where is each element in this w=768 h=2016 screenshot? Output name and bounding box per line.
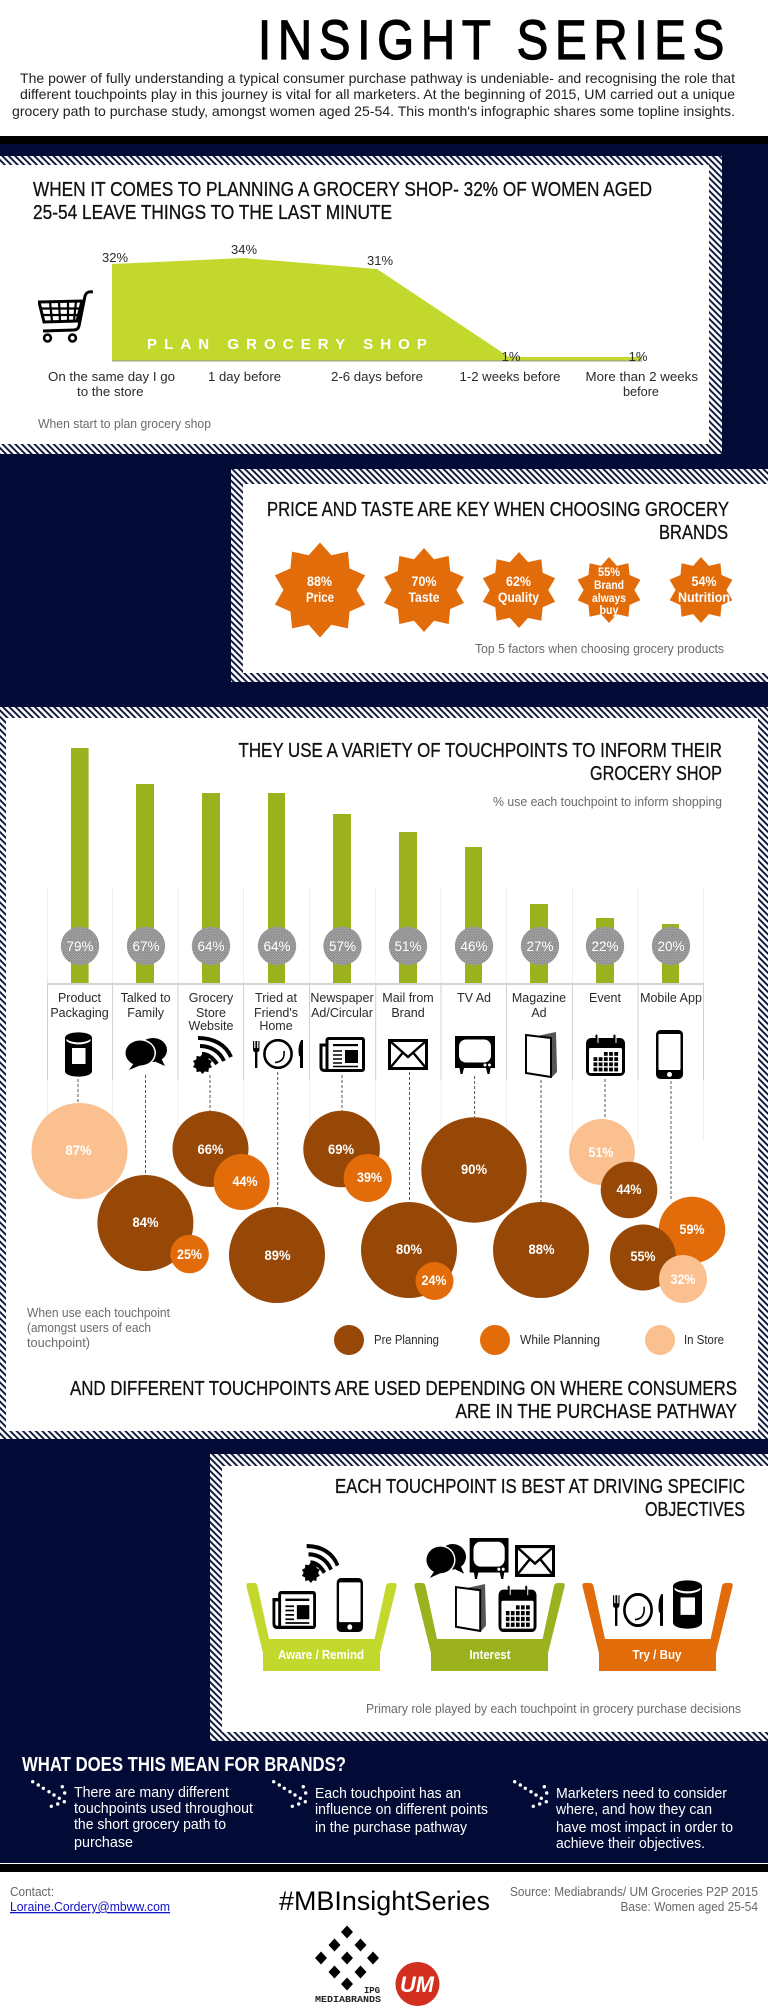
touchpoint labels: Brand bbox=[391, 1006, 425, 1020]
starburst: quality: Quality bbox=[498, 589, 539, 605]
intro text: grocery path to purchase study, amongst women aged 25-54. This month's infographic shares some topline insights. bbox=[12, 103, 735, 119]
logo: ipg mediabrands bbox=[315, 1926, 382, 2005]
touchpoint labels: Mobile App bbox=[640, 991, 702, 1005]
takeaway 3: Marketers need to consider bbox=[556, 1786, 727, 1802]
hashtag: #MBInsightSeries bbox=[279, 1886, 490, 1916]
bubble chart: 80% bbox=[396, 1241, 423, 1257]
icon: tv bbox=[470, 1538, 509, 1579]
caption: when use each touchpoint: touchpoint) bbox=[27, 1335, 90, 1350]
heading: planning bbox=[33, 179, 652, 224]
heading: objectives bbox=[335, 1476, 745, 1521]
heading: touchpoints: GROCERY SHOP bbox=[590, 763, 722, 785]
contact: Loraine.Cordery@mbww.com bbox=[10, 1899, 170, 1914]
category labels bbox=[48, 369, 699, 399]
touchpoint labels: Friend's bbox=[254, 1006, 298, 1020]
heading: planning: WHEN IT COMES TO PLANNING A GROCERY SHOP- 32% OF WOMEN AGED bbox=[33, 179, 652, 201]
icon: plate bbox=[253, 1040, 303, 1068]
heading: planning: 25-54 LEAVE THINGS TO THE LAST MINUTE bbox=[33, 202, 392, 224]
touchpoint labels: Store bbox=[196, 1006, 226, 1020]
bubble chart: 25% bbox=[177, 1246, 202, 1262]
caption: planning: When start to plan grocery shop bbox=[38, 416, 211, 431]
bar chart bbox=[71, 748, 679, 983]
basket: try / buy bbox=[582, 1583, 733, 1671]
legend: Pre Planning bbox=[374, 1332, 439, 1347]
grid lines bbox=[48, 888, 704, 1140]
touchpoint labels: Grocery bbox=[189, 991, 234, 1005]
icon: shopping cart bbox=[38, 290, 93, 343]
starburst: brand always buy bbox=[578, 557, 640, 623]
area chart: PLAN GROCERY SHOP bbox=[147, 336, 434, 353]
basket: interest: Interest bbox=[470, 1647, 511, 1662]
icon: newspaper bbox=[274, 1593, 315, 1627]
section: what does this mean for brands bbox=[22, 1754, 733, 1852]
starburst: quality bbox=[483, 552, 555, 628]
area chart: 1% bbox=[502, 349, 521, 364]
bubble chart: 32% bbox=[670, 1271, 696, 1287]
percentage badges: 27% bbox=[526, 939, 554, 954]
bubble chart: 24% bbox=[422, 1272, 447, 1288]
takeaway 1: There are many different bbox=[74, 1785, 229, 1801]
caption: when use each touchpoint: (amongst users of each bbox=[27, 1320, 151, 1335]
heading: price and taste bbox=[267, 499, 729, 544]
legend: In Store bbox=[684, 1332, 724, 1347]
heading: brands: WHAT DOES THIS MEAN FOR BRANDS? bbox=[22, 1754, 346, 1776]
touchpoint labels: TV Ad bbox=[457, 991, 491, 1005]
panel: objectives bbox=[210, 1454, 768, 1741]
percentage badges: 64% bbox=[263, 939, 291, 954]
takeaway 1 bbox=[31, 1780, 253, 1851]
chart baseline bbox=[47, 983, 704, 985]
starburst: brand always buy: Brand bbox=[594, 578, 624, 592]
icon: wifi burst bbox=[302, 1546, 338, 1583]
logo: ipg mediabrands: IPG bbox=[364, 1986, 380, 1996]
bubble chart: 89% bbox=[264, 1247, 291, 1263]
icon: chat bubbles bbox=[124, 1038, 167, 1070]
icon: newspaper bbox=[321, 1038, 364, 1070]
area chart: 31% bbox=[367, 253, 393, 268]
touchpoint labels: Magazine bbox=[512, 991, 566, 1005]
area chart: 1% bbox=[629, 349, 648, 364]
takeaway 3 bbox=[513, 1780, 733, 1852]
category labels: 1 day before bbox=[208, 369, 281, 384]
touchpoint labels: Talked to bbox=[121, 991, 171, 1005]
bubble chart: 59% bbox=[680, 1221, 705, 1237]
logo: um bbox=[396, 1962, 440, 2006]
area chart: 34% bbox=[231, 242, 257, 257]
heading: touchpoints bbox=[238, 740, 722, 785]
category labels: before bbox=[623, 384, 659, 399]
icon: chat bubbles bbox=[425, 1544, 466, 1578]
icon: plate bbox=[613, 1594, 663, 1626]
icon: mobile phone bbox=[337, 1578, 363, 1632]
touchpoint labels: Ad bbox=[531, 1006, 547, 1020]
bubble chart: 66% bbox=[198, 1141, 224, 1157]
touchpoint labels bbox=[50, 991, 702, 1033]
bubble chart: 87% bbox=[66, 1142, 92, 1158]
bubble chart: 44% bbox=[616, 1181, 642, 1197]
percentage badges: 20% bbox=[657, 939, 685, 954]
icon: mobile phone bbox=[656, 1030, 683, 1079]
icon: tv bbox=[455, 1036, 495, 1074]
touchpoint labels: Family bbox=[127, 1006, 165, 1020]
starburst: brand always buy: always bbox=[592, 591, 626, 605]
basket: aware / remind bbox=[246, 1583, 397, 1671]
basket: try / buy: Try / Buy bbox=[632, 1647, 682, 1662]
takeaway 2: in the purchase pathway bbox=[315, 1820, 468, 1836]
starburst: price: Price bbox=[306, 589, 334, 605]
panel: planning a grocery shop bbox=[0, 156, 722, 454]
caption: top 5 factors: Top 5 factors when choosing grocery products bbox=[475, 641, 724, 656]
percentage badges: 46% bbox=[460, 939, 488, 954]
starburst: taste: 70% bbox=[412, 573, 437, 589]
icon: envelope bbox=[390, 1040, 426, 1068]
icon: magazine bbox=[456, 1584, 486, 1632]
icon: envelope bbox=[516, 1547, 554, 1575]
percentage badges: 57% bbox=[329, 939, 356, 954]
category labels: 1-2 weeks before bbox=[460, 369, 560, 384]
percentage badges: 22% bbox=[591, 939, 619, 954]
takeaway 1: touchpoints used throughout bbox=[74, 1801, 253, 1817]
footer bar bbox=[0, 1863, 768, 1872]
basket: interest bbox=[414, 1583, 565, 1671]
starburst: taste: Taste bbox=[408, 589, 440, 605]
icon: calendar bbox=[498, 1585, 536, 1632]
icon: calendar bbox=[586, 1034, 625, 1076]
bubble chart: 51% bbox=[588, 1144, 614, 1160]
touchpoint labels: Event bbox=[589, 991, 622, 1005]
icon: magazine bbox=[526, 1032, 557, 1078]
logo: ipg mediabrands: MEDIABRANDS bbox=[315, 1995, 382, 2005]
takeaway 3: have most impact in order to bbox=[556, 1820, 733, 1836]
starburst: price bbox=[275, 542, 365, 638]
area chart bbox=[102, 242, 648, 364]
takeaway 2: influence on different points bbox=[315, 1802, 488, 1818]
icon: can bbox=[65, 1032, 92, 1077]
bubble chart: 88% bbox=[528, 1241, 555, 1257]
starburst: price: 88% bbox=[307, 573, 332, 589]
bubble chart: 69% bbox=[328, 1141, 355, 1157]
touchpoint labels: Home bbox=[259, 1019, 293, 1033]
caption: primary role: Primary role played by each touchpoint in grocery purchase decisions bbox=[366, 1701, 741, 1716]
starburst: quality: 62% bbox=[506, 573, 531, 589]
legend: While Planning bbox=[520, 1332, 600, 1347]
percentage badges: 51% bbox=[394, 939, 422, 954]
contact: Contact: bbox=[10, 1884, 54, 1899]
source: Base: Women aged 25-54 bbox=[620, 1899, 758, 1914]
source bbox=[510, 1884, 758, 1914]
heading: purchase pathway bbox=[70, 1378, 737, 1423]
category labels: On the same day I go bbox=[48, 369, 175, 384]
touchpoint labels: Newspaper bbox=[310, 991, 374, 1005]
touchpoint labels: Website bbox=[189, 1019, 234, 1033]
basket: aware / remind: Aware / Remind bbox=[278, 1647, 364, 1662]
contact bbox=[10, 1884, 170, 1914]
starburst: nutrition: Nutrition bbox=[678, 589, 730, 605]
touchpoint labels: Mail from bbox=[382, 991, 434, 1005]
caption: when use each touchpoint: When use each touchpoint bbox=[27, 1305, 170, 1320]
panel: price and taste bbox=[231, 469, 768, 682]
touchpoint labels: Product bbox=[58, 991, 102, 1005]
category labels: 2-6 days before bbox=[331, 369, 423, 384]
icon: wifi burst bbox=[193, 1038, 231, 1074]
area chart: 32% bbox=[102, 250, 128, 265]
takeaway 2 bbox=[272, 1780, 488, 1836]
touchpoint labels: Ad/Circular bbox=[311, 1006, 373, 1020]
panel: touchpoints bbox=[0, 707, 768, 1439]
heading: objectives: OBJECTIVES bbox=[645, 1499, 745, 1521]
takeaway 1: the short grocery path to bbox=[74, 1817, 226, 1833]
caption: use each touchpoint: % use each touchpoint to inform shopping bbox=[493, 794, 722, 809]
starburst: taste bbox=[384, 548, 464, 632]
takeaway 1: purchase bbox=[74, 1835, 133, 1851]
caption: when use each touchpoint bbox=[27, 1305, 170, 1350]
bubble chart: 90% bbox=[461, 1161, 488, 1177]
heading: price and taste: BRANDS bbox=[659, 522, 728, 544]
starburst: brand always buy: 55% bbox=[598, 565, 620, 579]
bubble chart: 44% bbox=[232, 1173, 258, 1189]
percentage badges: 67% bbox=[132, 939, 160, 954]
starburst: nutrition: 54% bbox=[692, 573, 717, 589]
dashed connectors bbox=[78, 1072, 671, 1207]
takeaway 3: where, and how they can bbox=[555, 1802, 712, 1818]
logo: um: UM bbox=[400, 1972, 435, 1997]
top black bar bbox=[0, 136, 768, 144]
percentage badges: 79% bbox=[66, 939, 94, 954]
category labels: More than 2 weeks bbox=[586, 369, 699, 384]
starburst: nutrition bbox=[670, 557, 732, 623]
touchpoint labels: Packaging bbox=[50, 1006, 109, 1020]
intro text bbox=[12, 70, 735, 119]
bubble chart bbox=[32, 1103, 725, 1303]
bubble chart: 39% bbox=[357, 1169, 382, 1185]
percentage badges: 64% bbox=[197, 939, 225, 954]
legend bbox=[334, 1325, 724, 1355]
icon: can bbox=[673, 1580, 702, 1629]
percentage badges bbox=[61, 927, 690, 965]
bubble chart: 84% bbox=[132, 1214, 159, 1230]
starburst: brand always buy: buy bbox=[600, 603, 619, 617]
takeaway 2: Each touchpoint has an bbox=[315, 1786, 461, 1802]
takeaway 3: achieve their objectives. bbox=[556, 1836, 705, 1852]
intro text: The power of fully understanding a typical consumer purchase pathway is undeniable- and recognising the role that bbox=[20, 70, 735, 86]
touchpoint labels: Tried at bbox=[255, 991, 297, 1005]
category labels: to the store bbox=[77, 384, 144, 399]
intro text: different touchpoints play in this journey is vital for all marketers. At the beginning of 2015, UM carried out a unique bbox=[20, 86, 735, 102]
bubble chart: 55% bbox=[630, 1248, 656, 1264]
